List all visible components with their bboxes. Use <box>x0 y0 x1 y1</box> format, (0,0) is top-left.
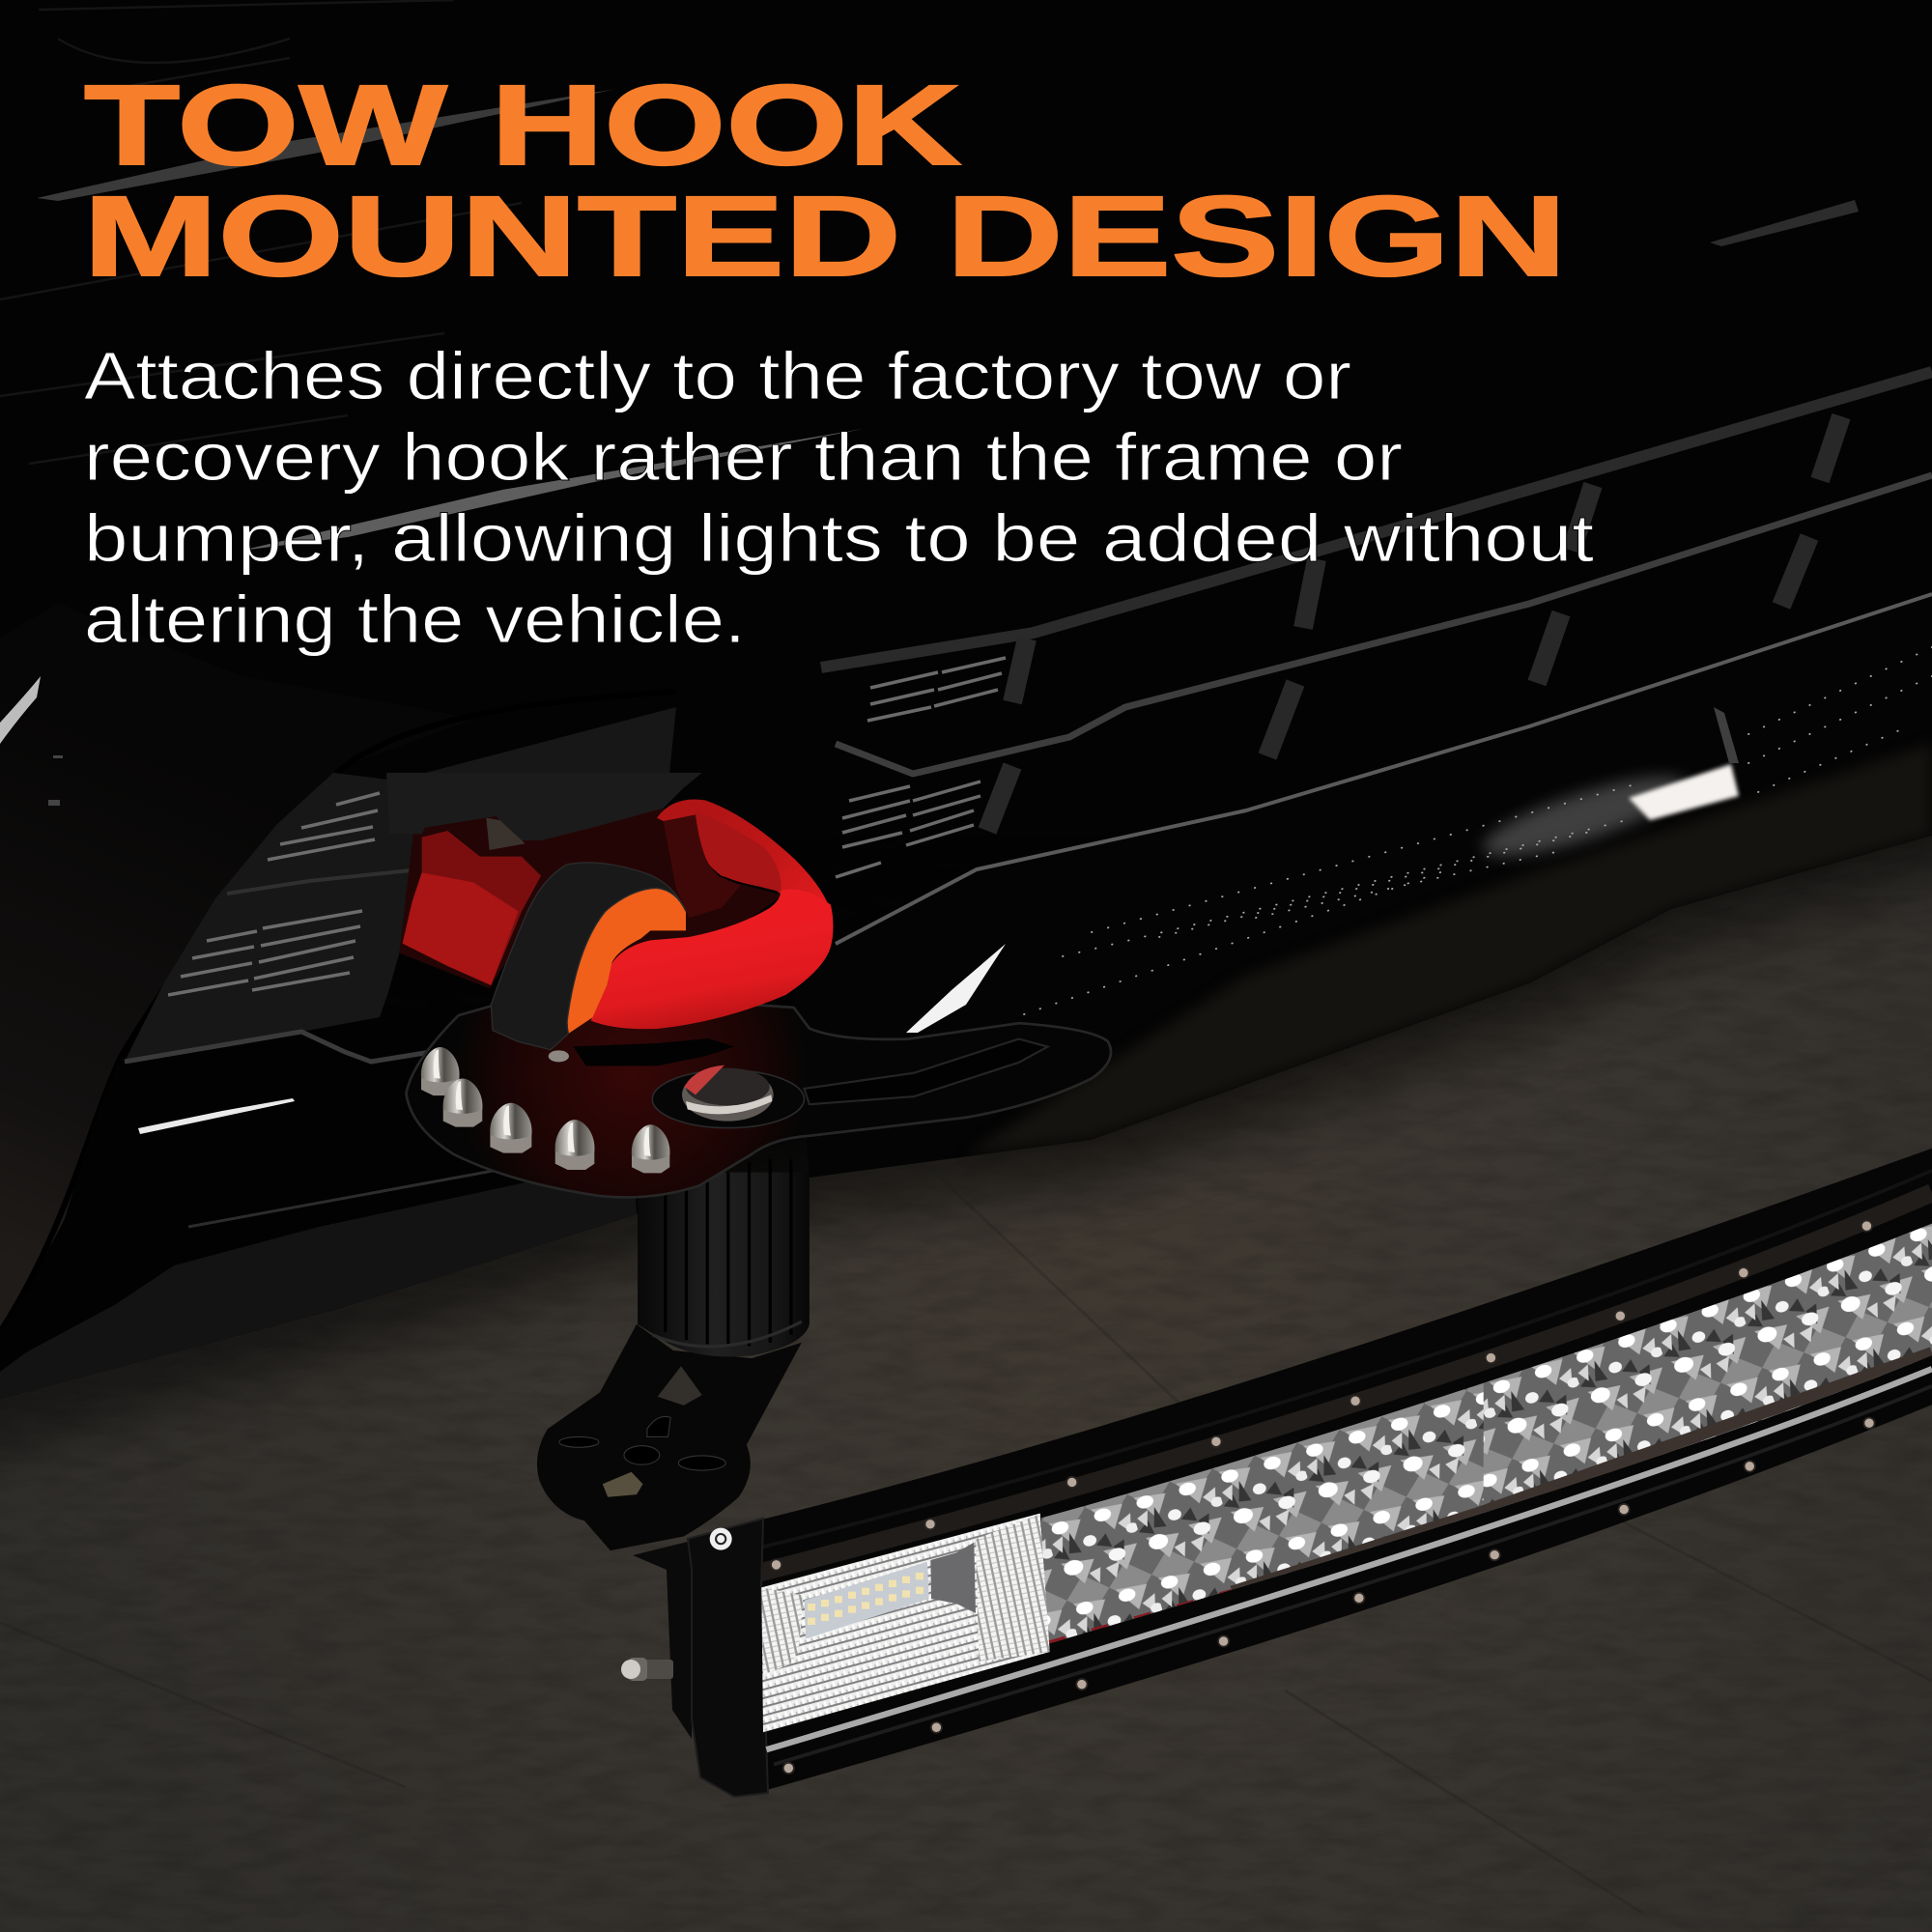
lit shank face <box>403 872 519 985</box>
body text: bumper, allowing lights to be added without <box>84 500 1594 576</box>
body text <box>84 338 1594 657</box>
title: TOW HOOK <box>84 62 961 189</box>
front ring band <box>591 890 833 1029</box>
curved LED light bar <box>621 1149 1932 1797</box>
left vents <box>168 793 380 995</box>
end cap <box>688 1519 768 1797</box>
lit arm face <box>696 811 781 892</box>
shank <box>403 831 541 985</box>
long plate slot <box>804 1038 1048 1104</box>
side bolt <box>621 1658 673 1681</box>
outer left reflector <box>761 1587 804 1674</box>
body text: recovery hook rather than the frame or <box>84 419 1403 495</box>
left grille panel <box>125 707 676 1062</box>
LED chip panel <box>805 1562 929 1639</box>
dark reflector block <box>930 1543 976 1613</box>
screw band <box>752 1193 1932 1575</box>
opening behind hook <box>399 809 782 988</box>
plate slot <box>573 1038 734 1065</box>
rail screws <box>771 1221 1875 1774</box>
garage floor <box>0 816 1932 1932</box>
glossy black lower left area and lip <box>0 1032 676 1399</box>
body text: altering the vehicle. <box>84 582 746 657</box>
upper panel over hook <box>386 773 702 840</box>
LED reflector section <box>1041 1223 1932 1644</box>
shadow side of arm <box>664 814 741 918</box>
lower rail groove <box>774 1386 1932 1765</box>
mount arm and post <box>406 1000 1111 1550</box>
bumper highlight and speckles <box>906 647 1932 1033</box>
wedge behind hook <box>486 818 525 850</box>
acorn nuts <box>421 1047 669 1173</box>
mount ear <box>633 1541 692 1739</box>
right vents <box>836 658 1006 877</box>
silver lower strip <box>766 1369 1932 1749</box>
button head bolt <box>682 1065 774 1122</box>
recovery hook in close-up frame <box>386 773 833 1122</box>
title: MOUNTED DESIGN <box>83 173 1567 300</box>
truck body reflections at top <box>0 0 1859 551</box>
flood section <box>761 1514 1050 1732</box>
fender <box>0 604 676 1332</box>
rear housing rail <box>727 1149 1932 1795</box>
mounting plate <box>406 1000 1111 1197</box>
rail groove <box>739 1171 1932 1552</box>
right grille bars <box>821 372 1932 944</box>
soft shackle strap <box>491 863 686 1050</box>
grille slats <box>987 416 1841 831</box>
title <box>83 62 1567 300</box>
CE badge <box>710 1528 732 1550</box>
shackle pin <box>549 1050 569 1062</box>
thimble <box>567 888 686 1034</box>
warm LED chips <box>808 1573 923 1625</box>
body text: Attaches directly to the factory tow or <box>84 338 1351 413</box>
ribbed post <box>638 1159 810 1356</box>
ring outer upper arm <box>657 799 833 918</box>
vertical reflector block <box>976 1514 1050 1662</box>
L bracket arm <box>537 1324 802 1550</box>
under-bumper band <box>966 744 1932 1154</box>
button bolt washer <box>652 1070 804 1128</box>
dark bumper lower surface <box>792 594 1932 1178</box>
tow hook and mount assembly <box>386 773 1111 1550</box>
